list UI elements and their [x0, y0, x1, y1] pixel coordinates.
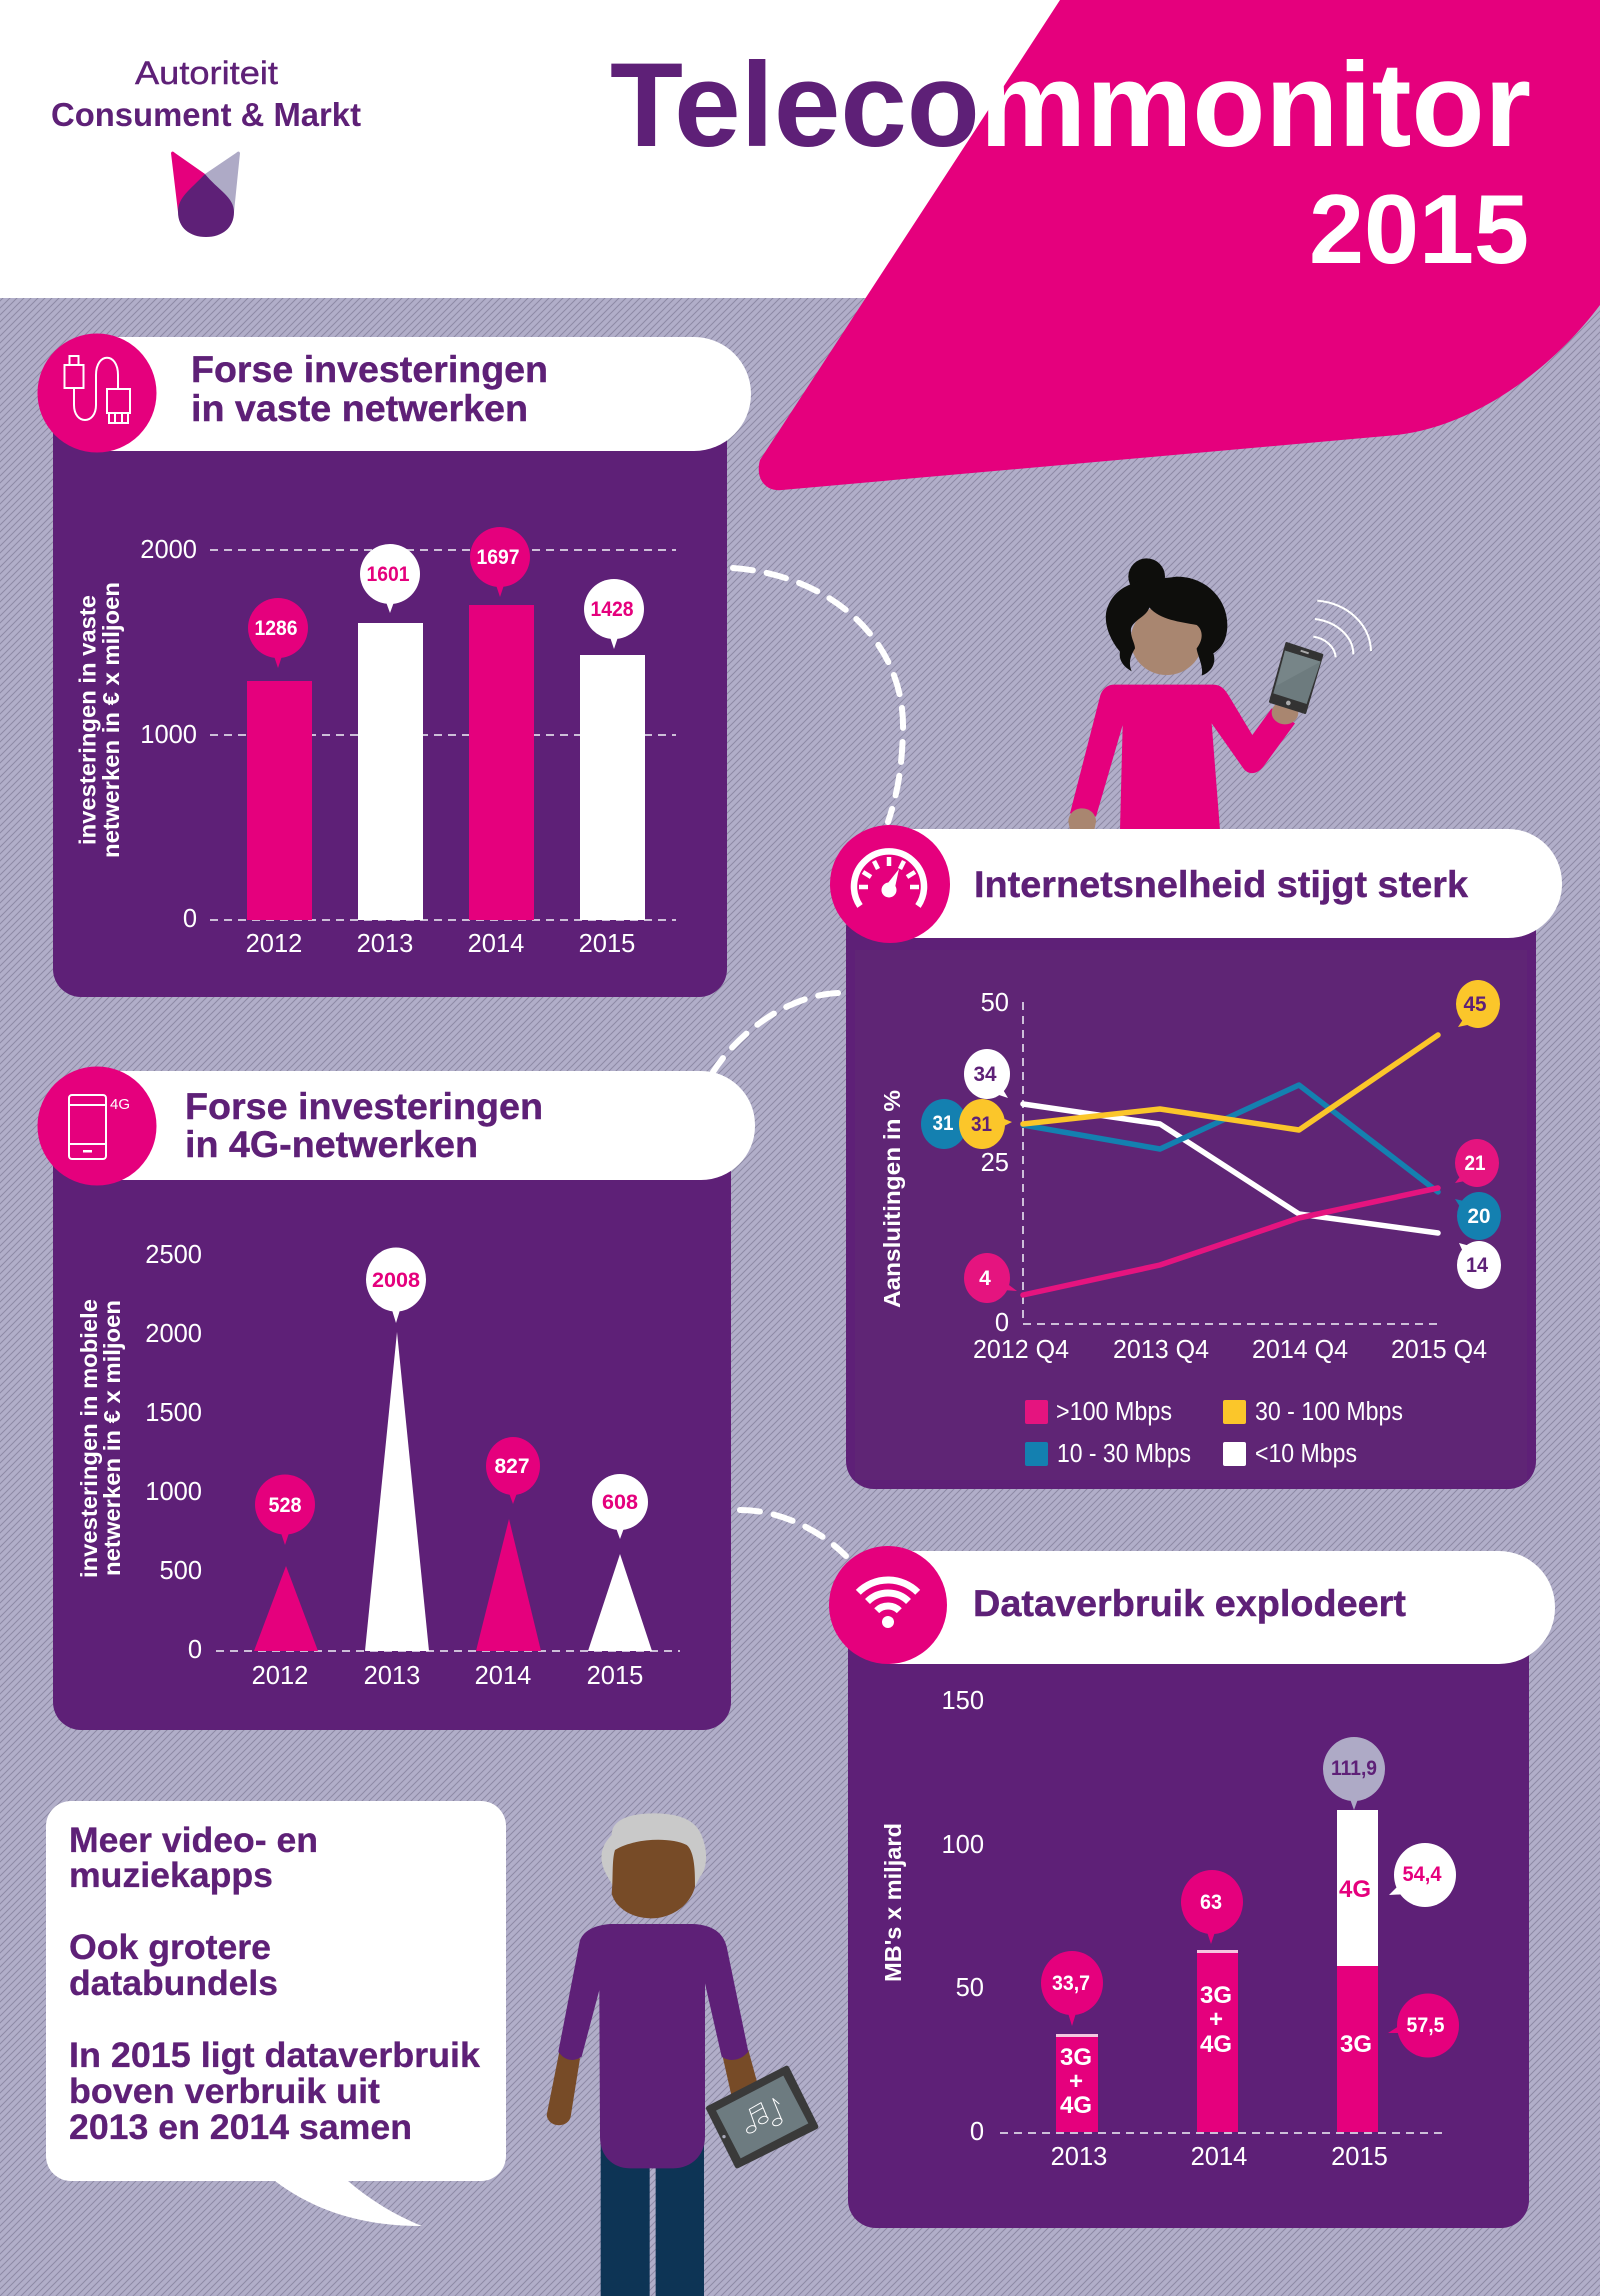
value bubble 111,9: 111,9: [1331, 1757, 1377, 1780]
stacked bar chart: dataverbruik: 2015: [1331, 2143, 1388, 2171]
line chart: aansluitingen per snelheid: 25: [981, 1149, 1009, 1177]
legend: 10 - 30 Mbps: [1057, 1440, 1191, 1468]
value bubble 2008: 2008: [372, 1269, 420, 1292]
value bubble 57,5: 57,5: [1406, 2014, 1445, 2037]
value bubble 1601: 1601: [366, 563, 410, 586]
stacked bar chart: dataverbruik: 3G: [1200, 1982, 1232, 2009]
value bubble 528: [255, 1474, 315, 1545]
woman hand left: [1068, 808, 1096, 830]
icon: 4G phone: [38, 1066, 156, 1186]
line chart: aansluitingen per snelheid: 0: [995, 1309, 1009, 1337]
triangle chart: 4G investeringen: 500: [159, 1557, 202, 1585]
man shirt: [558, 1924, 748, 2168]
stacked bar chart: dataverbruik: 4G: [1339, 1876, 1371, 1903]
stacked bar chart: dataverbruik: 3G: [1060, 2044, 1092, 2071]
panel: dataverbruik explodeert: [829, 1546, 1555, 2228]
value bubble 608: [592, 1474, 648, 1539]
value bubble 63: [1181, 1870, 1243, 1944]
illustration: woman with smartphone: [1068, 558, 1371, 830]
bubble text: boven verbruik uit: [69, 2072, 380, 2111]
line chart: aansluitingen per snelheid: 50: [981, 989, 1009, 1017]
value bubble 54,4: [1389, 1843, 1456, 1907]
man legs: [601, 2133, 704, 2296]
line value bubble 21: [1455, 1139, 1499, 1187]
triangle chart: 4G investeringen: 2500: [145, 1241, 202, 1269]
logo: Autoriteit Consument & Markt: [51, 55, 361, 237]
stacked bar chart: dataverbruik: 4G: [1200, 2031, 1232, 2058]
line chart: aansluitingen per snelheid: 2014 Q4: [1252, 1336, 1348, 1364]
triangle chart: 4G investeringen: 1000: [145, 1478, 202, 1506]
legend: >100 Mbps: [1056, 1398, 1172, 1426]
value bubble 57,5: [1388, 1994, 1459, 2058]
triangle chart: 4G investeringen: 0: [188, 1636, 202, 1664]
legend: <10 Mbps: [1255, 1440, 1357, 1468]
value bubble 528: 528: [268, 1494, 302, 1517]
bar chart: vaste netwerken: 2013: [357, 930, 413, 958]
line chart: aansluitingen per snelheid: Aansluitingen in %: [879, 1090, 905, 1308]
connector: 4G networks to data usage: [740, 1510, 846, 1556]
value bubble 1697: 1697: [476, 546, 520, 569]
triangle chart: 4G investeringen: investeringen in mobiele: [76, 1299, 102, 1578]
triangle chart: 4G investeringen: netwerken in € x miljoen: [99, 1300, 125, 1576]
title: Telecommonitor 2015: Telecommonitor: [610, 38, 1531, 172]
stacked bar chart: dataverbruik: MB's x miljard: [880, 1823, 906, 1982]
panel heading pill: [890, 829, 1562, 938]
line value bubble 20: 20: [1468, 1205, 1490, 1228]
stacked bar chart: dataverbruik: 50: [956, 1974, 984, 2002]
bar chart: vaste netwerken: 2000: [140, 536, 197, 564]
woman body: [1070, 685, 1295, 830]
value bubble 33,7: [1041, 1951, 1103, 2026]
illustration: man with tablet: [547, 1813, 816, 2296]
stacked bar chart: dataverbruik: +: [1209, 2006, 1223, 2033]
icon: 4G phone: 4G: [110, 1096, 130, 1113]
phone: [1270, 643, 1322, 713]
value bubble 608: 608: [602, 1491, 638, 1514]
value bubble 827: [486, 1437, 540, 1504]
tablet with music notes: [709, 2068, 816, 2166]
line value bubble 4: 4: [979, 1267, 991, 1290]
line chart: aansluitingen per snelheid: 2015 Q4: [1391, 1336, 1487, 1364]
legend: 30 - 100 Mbps: [1255, 1398, 1403, 1426]
line value bubble 34: 34: [974, 1063, 997, 1086]
man arms: [547, 2050, 758, 2125]
stacked bar chart: dataverbruik: [880, 1687, 1443, 2171]
value bubble 54,4: 54,4: [1402, 1863, 1442, 1886]
value bubble 111,9: [1323, 1737, 1385, 1810]
bubble text: In 2015 ligt dataverbruik: [69, 2036, 481, 2075]
value bubble 2008: [366, 1248, 426, 1323]
woman face: [1131, 605, 1203, 675]
value bubble 827: 827: [494, 1455, 530, 1478]
bubble text: Meer video- en: [69, 1821, 318, 1860]
bar chart: vaste netwerken: investeringen in vaste: [74, 595, 100, 845]
triangle chart: 4G investeringen: 2012: [252, 1662, 308, 1690]
icon: speedometer: [830, 825, 950, 943]
panel heading pill: Internetsnelheid stijgt sterk: [974, 864, 1468, 905]
value bubble 1697: [470, 527, 530, 597]
bubble text: Ook grotere: [69, 1928, 271, 1967]
triangle chart: 4G investeringen: 2015: [587, 1662, 643, 1690]
line value bubble 4: [964, 1253, 1017, 1303]
connector: fixed networks to internet speed: [733, 568, 903, 822]
bar chart: vaste netwerken: 2014: [468, 930, 524, 958]
line value bubble 31 blue: [921, 1099, 967, 1149]
bubble text: muziekapps: [69, 1856, 273, 1895]
bubble text: 2013 en 2014 samen: [69, 2108, 412, 2147]
line value bubble 20: [1455, 1192, 1501, 1240]
header: pink banner shape: [759, 0, 1600, 490]
value bubble 33,7: 33,7: [1052, 1972, 1090, 1995]
bar chart: vaste netwerken: 2015: [579, 930, 635, 958]
stacked bar chart: dataverbruik: 3G: [1340, 2031, 1372, 2058]
line value bubble 31 yellow: 31: [971, 1113, 992, 1136]
bubble text: [69, 1821, 481, 2147]
triangle chart: 4G investeringen: 1500: [145, 1399, 202, 1427]
logo: Autoriteit Consument & Markt: Consument & Markt: [51, 96, 361, 133]
legend: [1025, 1398, 1403, 1468]
bar chart: vaste netwerken: netwerken in € x miljoen: [98, 582, 124, 858]
line value bubble 21: 21: [1464, 1152, 1486, 1175]
title: Telecommonitor 2015: [610, 38, 1531, 284]
stacked bar chart: dataverbruik: +: [1069, 2068, 1083, 2095]
triangle chart: 4G investeringen: [76, 1241, 680, 1690]
icon: cable and plugs: [38, 334, 156, 452]
man face: [612, 1840, 695, 1918]
panel heading pill: Forse investeringen: [191, 349, 548, 390]
title: Telecommonitor 2015: 2015: [1309, 174, 1529, 284]
icon: wifi: [829, 1546, 947, 1664]
connector: internet speed to 4G networks: [713, 993, 838, 1072]
logo: Autoriteit Consument & Markt: Autoriteit: [135, 55, 278, 91]
value bubble 63: 63: [1200, 1891, 1222, 1914]
panel: internetsnelheid stijgt sterk: [830, 825, 1562, 1489]
stacked bar chart: dataverbruik: 4G: [1060, 2092, 1092, 2119]
line chart: aansluitingen per snelheid: 2012 Q4: [973, 1336, 1069, 1364]
line value bubble 45: 45: [1464, 993, 1487, 1016]
line value bubble 31 blue: 31: [932, 1112, 954, 1135]
triangle chart: 4G investeringen: 2000: [145, 1320, 202, 1348]
panel: forse investeringen in 4G-netwerken: [38, 1066, 755, 1730]
bar chart: vaste netwerken: 1000: [140, 721, 197, 749]
line value bubble 45: [1456, 980, 1500, 1028]
line chart: aansluitingen per snelheid: 2013 Q4: [1113, 1336, 1209, 1364]
bar chart: vaste netwerken: [74, 536, 676, 958]
triangle chart: 4G investeringen: 2013: [364, 1662, 420, 1690]
line value bubble 14: [1457, 1241, 1501, 1289]
stacked bar chart: dataverbruik: 2014: [1191, 2143, 1247, 2171]
panel heading pill: in 4G-netwerken: [185, 1124, 478, 1165]
value bubble 1428: [584, 579, 644, 649]
stacked bar chart: dataverbruik: 0: [970, 2118, 984, 2146]
stacked bar chart: dataverbruik: 150: [941, 1687, 984, 1715]
triangle chart: 4G investeringen: 2014: [475, 1662, 531, 1690]
panel heading pill: [97, 1071, 755, 1180]
woman hand right: [1272, 701, 1298, 724]
value bubble 1601: [360, 544, 420, 613]
stacked bar chart: dataverbruik: 100: [941, 1831, 984, 1859]
panel heading pill: Dataverbruik explodeert: [973, 1583, 1406, 1624]
panel: forse investeringen in vaste netwerken: [38, 334, 751, 997]
panel heading pill: in vaste netwerken: [191, 388, 528, 429]
line chart: aansluitingen per snelheid: [879, 989, 1487, 1364]
icon: tulip logo mark: [171, 152, 240, 237]
panel heading pill: Forse investeringen: [185, 1086, 543, 1127]
woman hair: [1106, 558, 1227, 676]
panel heading pill: [97, 337, 751, 451]
signal waves: [1313, 601, 1371, 657]
line value bubble 14: 14: [1466, 1254, 1488, 1277]
value bubble 1428: 1428: [590, 598, 634, 621]
bar chart: vaste netwerken: 0: [183, 905, 197, 933]
line value bubble 31 yellow: [959, 1099, 1012, 1149]
line value bubble 34: [964, 1049, 1010, 1099]
panel heading pill: [888, 1551, 1555, 1664]
bubble text: databundels: [69, 1964, 278, 2003]
value bubble 1286: [248, 598, 308, 668]
bar chart: vaste netwerken: 2012: [246, 930, 302, 958]
value bubble 1286: 1286: [254, 617, 298, 640]
man hair: [601, 1813, 706, 1887]
speech bubble: dataverbruik toelichting: [46, 1801, 506, 2226]
stacked bar chart: dataverbruik: 2013: [1051, 2143, 1107, 2171]
